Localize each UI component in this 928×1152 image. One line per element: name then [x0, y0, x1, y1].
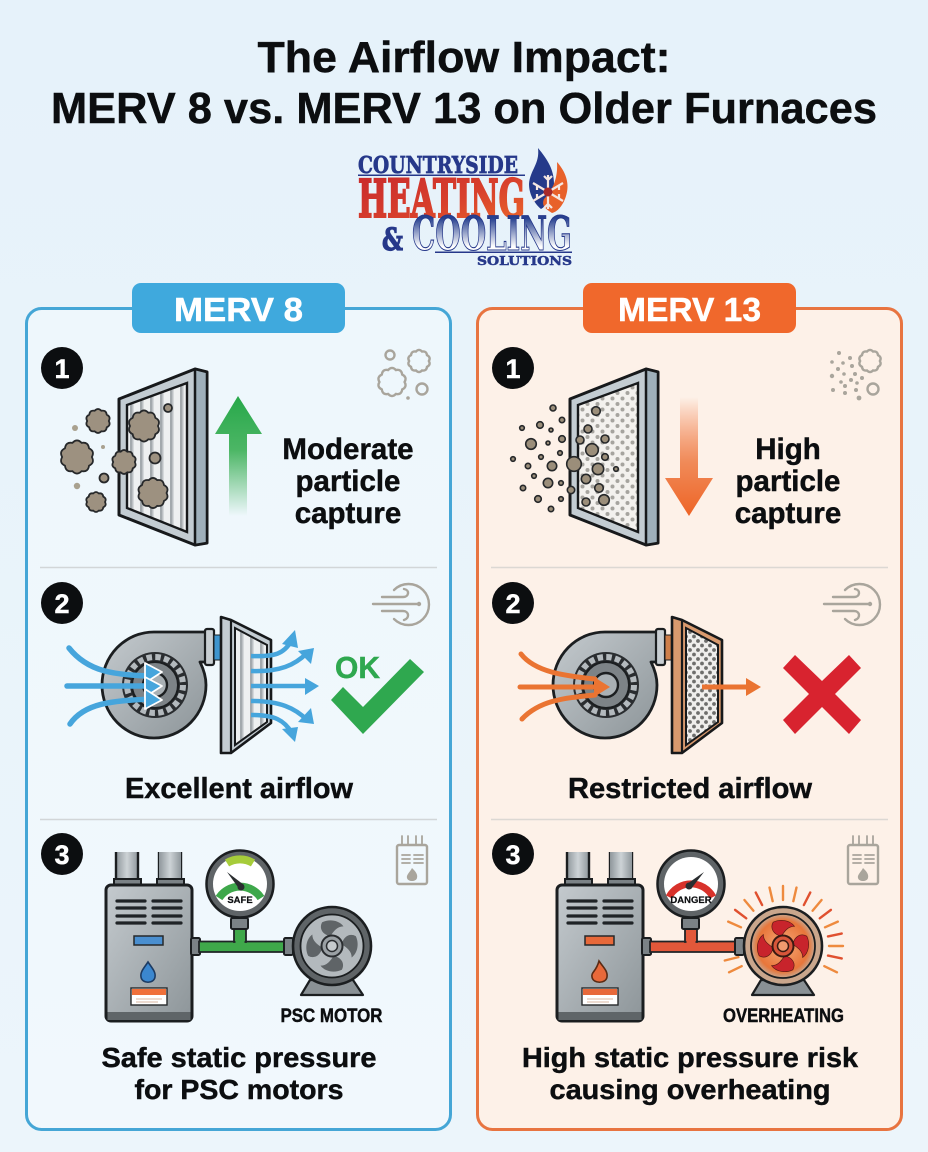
gauge: safe [206, 850, 274, 918]
step badge 3 [41, 833, 83, 875]
furnace unit [557, 852, 744, 1021]
title: The Airflow Impact: [258, 33, 670, 82]
step badge 1 [41, 347, 83, 389]
text: high particle capture: capture [735, 497, 841, 530]
gauge: safe: SAFE [227, 895, 253, 906]
title: MERV 8 vs. MERV 13 on Older Furnaces [51, 84, 877, 133]
header pill: MERV 13 [583, 283, 796, 333]
icon: red X [783, 655, 861, 734]
gauge: danger: DANGER [670, 895, 712, 906]
header pill: MERV 13: MERV 13 [618, 291, 761, 328]
text: moderate particle capture: capture [295, 497, 401, 530]
arrow: airflow down [665, 397, 713, 516]
arrows: air out of filter [251, 630, 319, 742]
label: overheating: OVERHEATING [723, 1006, 844, 1027]
title [51, 33, 877, 133]
pleated filter with large particles [61, 369, 207, 545]
text: high particle capture: particle [736, 465, 840, 498]
arrows: restricted air in [520, 654, 610, 719]
text: restricted airflow: Restricted airflow [568, 773, 812, 805]
text: moderate particle capture [282, 433, 414, 530]
icon: fine particles [830, 350, 881, 400]
step badge 2: 2 [54, 589, 70, 619]
icon: wind gauge [373, 584, 429, 625]
company logo: & [382, 222, 403, 258]
label: PSC motor: PSC MOTOR [280, 1006, 383, 1027]
step badge 3: 3 [54, 840, 70, 870]
text: high static pressure: High static pressure risk [522, 1042, 859, 1073]
step badge 2: 2 [505, 589, 521, 619]
icon: OK check mark: OK [335, 650, 381, 685]
arrows: air into blower [67, 648, 162, 724]
text: high static pressure: causing overheating [550, 1074, 830, 1105]
icon: OK check mark [331, 650, 424, 734]
motor: overheating [725, 886, 843, 995]
furnace unit [106, 852, 293, 1021]
step badge 3: 3 [505, 840, 521, 870]
icon: furnace [848, 836, 878, 884]
step badge 1 [492, 347, 534, 389]
step badge 2 [492, 582, 534, 624]
text: high static pressure [522, 1042, 859, 1105]
fine mesh filter with particles [511, 369, 658, 545]
panel: MERV 8 [26, 283, 450, 1130]
text: high particle capture [735, 433, 841, 530]
step badge 1: 1 [505, 354, 521, 384]
arrow: airflow up [215, 396, 262, 516]
blower with clean filter [102, 617, 271, 753]
panel frame [26, 308, 450, 1130]
company logo: COOLING [412, 207, 572, 262]
header pill: MERV 8 [132, 283, 345, 333]
step badge 2 [41, 582, 83, 624]
header pill: MERV 8: MERV 8 [174, 291, 303, 328]
blower with clogged filter [553, 617, 722, 753]
panel: MERV 13 [478, 283, 902, 1130]
icon: furnace [397, 836, 427, 884]
text: high particle capture: High [755, 433, 821, 466]
gauge: danger [658, 850, 724, 918]
icon: logo flame and snowflake [529, 148, 568, 213]
company logo: SOLUTIONS [477, 253, 572, 268]
step badge 1: 1 [54, 354, 70, 384]
arrow: weak air out [702, 678, 761, 696]
text: moderate particle capture: particle [296, 465, 400, 498]
panel frame [478, 308, 902, 1130]
icon: particles [378, 350, 430, 400]
text: excellent airflow: Excellent airflow [125, 773, 353, 805]
company logo: HEATING [358, 169, 525, 230]
company logo [358, 148, 572, 268]
step badge 3 [492, 833, 534, 875]
text: moderate particle capture: Moderate [282, 433, 414, 466]
company logo: COUNTRYSIDE [358, 152, 518, 179]
text: safe static pressure [102, 1042, 376, 1105]
motor: PSC [293, 907, 371, 995]
text: safe static pressure: Safe static pressure [102, 1042, 376, 1073]
icon: wind gauge [824, 584, 880, 625]
text: safe static pressure: for PSC motors [134, 1074, 344, 1105]
